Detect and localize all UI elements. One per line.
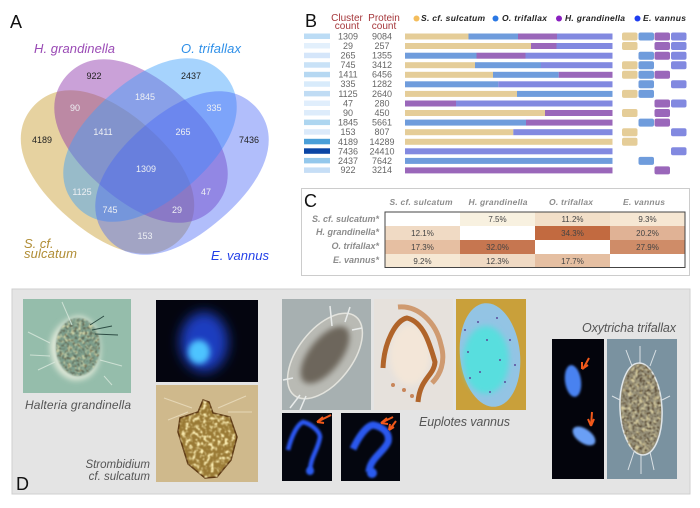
micrograph: Euplotes vannus DAPI right — [341, 413, 400, 481]
Venn counts: 335 — [206, 103, 222, 113]
panel C frame — [302, 188, 690, 276]
cluster counts: 335 — [340, 79, 356, 89]
micrograph: Oxytricha trifallax — [607, 339, 677, 479]
micrograph: Euplotes vannus DAPI left — [282, 413, 332, 481]
heat map values: 12.3% — [486, 257, 509, 266]
heat map values: 17.3% — [411, 243, 434, 252]
panel letter D: D — [16, 474, 29, 494]
panel letter B: B — [305, 11, 317, 31]
column headers: E. vannus — [623, 197, 665, 207]
heat map values: 34.3% — [561, 229, 584, 238]
Venn counts: 29 — [172, 205, 182, 215]
column heading: protein count — [368, 13, 400, 32]
heat map values: 11.2% — [561, 215, 584, 224]
Venn counts: 153 — [137, 231, 153, 241]
cluster counts: 745 — [340, 60, 356, 70]
column headers — [390, 197, 665, 207]
column heading: cluster count: count — [335, 21, 359, 32]
heat map values: 27.9% — [636, 243, 659, 252]
protein counts: 2640 — [372, 89, 392, 99]
Venn counts: 7436 — [239, 135, 259, 145]
Venn counts: 2437 — [181, 71, 201, 81]
protein counts: 14289 — [369, 137, 395, 147]
species label: sulcatum line: sulcatum — [24, 246, 77, 261]
row headers: S. cf. sulcatum* — [312, 214, 379, 224]
protein counts: 280 — [374, 98, 390, 108]
Venn counts: 90 — [70, 103, 80, 113]
micrograph: Halteria grandinella — [23, 299, 131, 393]
legend: O. trifallax — [502, 13, 548, 23]
species membership matrix — [622, 32, 686, 174]
cluster counts: 1309 — [338, 32, 358, 42]
micrograph: Euplotes vannus brightfield — [282, 299, 371, 410]
column heading: protein count: Protein — [368, 13, 400, 24]
row headers: E. vannus* — [333, 255, 379, 265]
Venn counts: 265 — [175, 127, 191, 137]
heat map values: 9.3% — [638, 215, 657, 224]
protein counts: 9084 — [372, 32, 392, 42]
protein counts: 450 — [374, 108, 390, 118]
Venn counts: 1411 — [93, 127, 113, 137]
stacked bars — [405, 34, 612, 173]
row headers — [312, 214, 379, 265]
protein counts: 1355 — [372, 50, 392, 60]
arrows: Oxytricha nuclei markers — [582, 358, 594, 426]
Venn counts: 1845 — [135, 92, 155, 102]
heat map values: 17.7% — [561, 257, 584, 266]
cluster counts: 1125 — [338, 89, 358, 99]
species caption: Halteria grandinella: Halteria grandinella — [25, 398, 131, 412]
arrow: micronucleus marker left — [317, 415, 331, 423]
heat map values: 20.2% — [636, 229, 659, 238]
cluster heat strip — [304, 34, 330, 173]
panel D: ciliate micrographs — [12, 289, 690, 494]
species caption: Euplotes vannus: Euplotes vannus — [419, 415, 510, 429]
panel letter C: C — [304, 191, 317, 211]
heat map values: 7.5% — [488, 215, 507, 224]
panel D background — [12, 289, 690, 494]
column heading: cluster count: Cluster — [331, 13, 364, 24]
Venn counts: 745 — [102, 205, 118, 215]
cluster counts: 1411 — [338, 70, 358, 80]
cluster counts — [338, 32, 358, 175]
panel A: four-way Venn diagram — [0, 12, 296, 283]
panel C: pairwise percentage heat map — [302, 188, 690, 276]
column headers: O. trifallax — [549, 197, 594, 207]
heat map values — [411, 215, 659, 266]
legend — [414, 13, 686, 23]
column headers: S. cf. sulcatum — [390, 197, 453, 207]
column heading: cluster count — [331, 13, 364, 32]
protein counts: 807 — [374, 127, 390, 137]
arrows: micronuclei markers right — [381, 417, 396, 430]
cluster counts: 153 — [340, 127, 356, 137]
heat map values: 9.2% — [413, 257, 432, 266]
protein counts: 3214 — [372, 165, 392, 175]
Venn counts: 1309 — [136, 164, 156, 174]
species caption: Strombidium cf. sulcatum — [85, 459, 150, 483]
protein counts — [369, 32, 395, 175]
cluster counts: 4189 — [338, 137, 358, 147]
micrograph: Strombidium DAPI stain — [156, 300, 258, 382]
Venn ellipses — [0, 30, 296, 283]
Venn counts — [32, 71, 259, 241]
species label: S. cf. sulcatum: S. cf. — [24, 236, 54, 251]
Venn counts: 4189 — [32, 135, 52, 145]
cluster counts: 265 — [340, 50, 356, 60]
cluster counts: 47 — [343, 98, 353, 108]
species caption: Strombidium cf. sulcatum: Strombidium — [85, 459, 150, 471]
micrograph: Euplotes vannus silver stain — [380, 304, 446, 402]
cluster counts: 922 — [340, 165, 356, 175]
protein counts: 257 — [374, 41, 390, 51]
column heading: protein count: count — [372, 21, 396, 32]
protein counts: 1282 — [372, 79, 392, 89]
species label: E. vannus: E. vannus — [211, 248, 270, 263]
heat map values: 12.1% — [411, 229, 434, 238]
micrograph: Strombidium cf. sulcatum — [156, 385, 258, 482]
protein counts: 6456 — [372, 70, 392, 80]
micrograph: Euplotes vannus ciliary pattern — [455, 299, 526, 410]
species label: H. grandinella: H. grandinella — [34, 41, 115, 56]
cluster counts: 1845 — [338, 118, 358, 128]
legend: S. cf. sulcatum — [421, 13, 485, 23]
cluster counts: 2437 — [338, 156, 358, 166]
panel letter A: A — [10, 12, 22, 32]
Venn counts: 47 — [201, 187, 211, 197]
heat map cells — [385, 212, 685, 268]
cluster counts: 29 — [343, 41, 353, 51]
cluster counts: 7436 — [338, 146, 358, 156]
Venn counts: 922 — [86, 71, 102, 81]
cluster counts: 90 — [343, 108, 353, 118]
legend: H. grandinella — [565, 13, 625, 23]
species caption: Oxytricha trifallax: Oxytricha trifallax — [582, 321, 677, 335]
micrograph: Oxytricha DAPI — [552, 339, 604, 479]
protein counts: 7642 — [372, 156, 392, 166]
Venn counts: 1125 — [72, 187, 92, 197]
heat map values: 32.0% — [486, 243, 509, 252]
row headers: O. trifallax* — [331, 241, 379, 251]
protein counts: 24410 — [369, 146, 395, 156]
protein counts: 5661 — [372, 118, 392, 128]
row headers: H. grandinella* — [316, 227, 379, 237]
column headers: H. grandinella — [468, 197, 528, 207]
species label: O. trifallax: O. trifallax — [181, 41, 242, 56]
protein counts: 3412 — [372, 60, 392, 70]
panel B: cluster and protein counts with stacked bars — [304, 11, 686, 175]
species caption: Strombidium cf. sulcatum: cf. sulcatum — [89, 471, 150, 483]
legend: E. vannus — [643, 13, 686, 23]
